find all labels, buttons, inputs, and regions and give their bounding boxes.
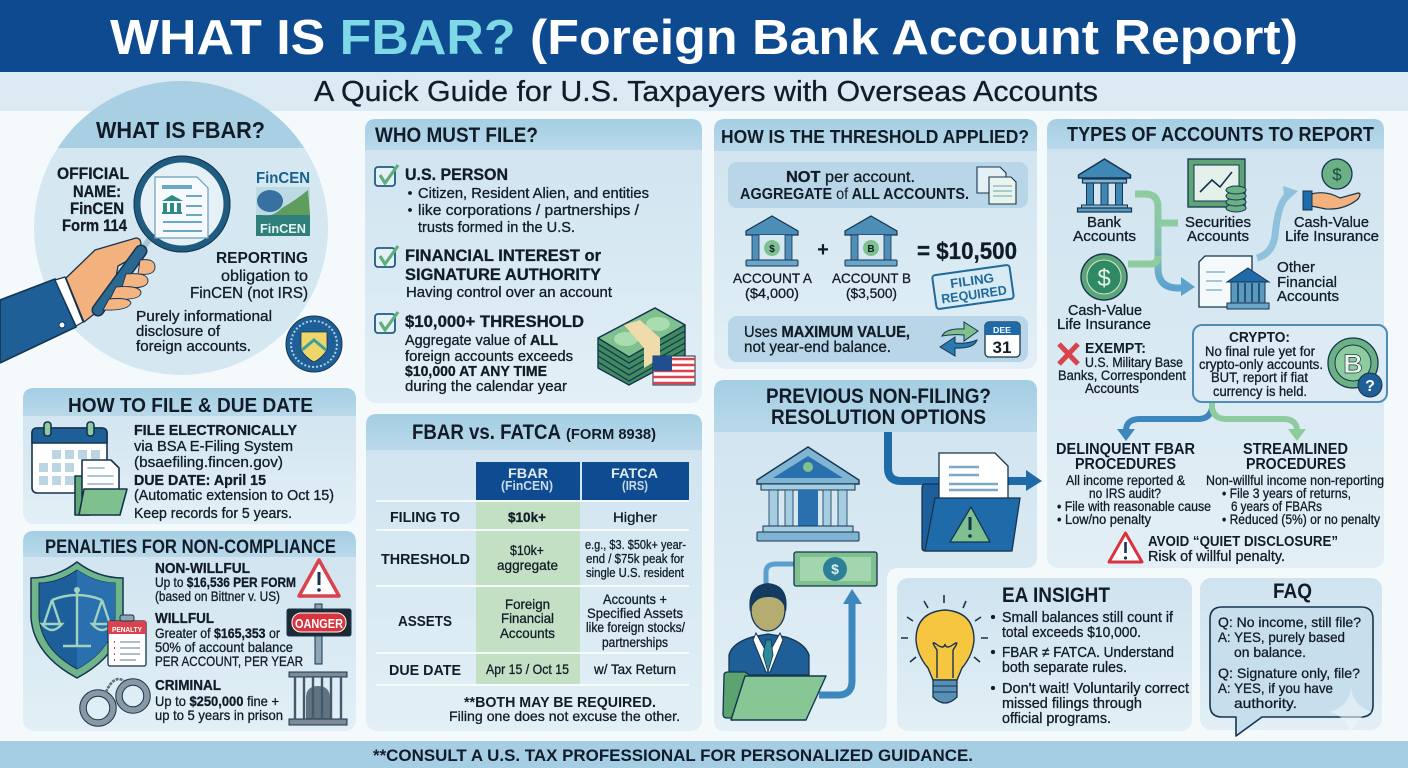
label: account A: ($4,000): [745, 285, 799, 301]
callout: maximum value: Uses MAXIMUM VALUE,: [744, 324, 910, 341]
item: cash-value coin: Cash-Value: [1068, 302, 1142, 319]
text: non-willful: [155, 560, 296, 604]
text: delinquent procedures: • File with reasonable cause: [1057, 499, 1211, 514]
item: cash-value coin: [1057, 254, 1151, 333]
icon: calendar and folder: [32, 422, 127, 515]
text: willful: Greater of $165,353 or: [155, 625, 280, 641]
item: cash-value life insurance, hand: $: [1332, 165, 1342, 184]
icon: warning triangle: [299, 560, 339, 596]
item: threshold: [375, 312, 584, 395]
text: filing details: (Automatic extension to Oct 15): [134, 487, 334, 504]
logo: FinCEN: FinCEN: [260, 221, 306, 236]
bullets: insights: missed filings through: [1002, 696, 1142, 712]
text: willful: [155, 610, 303, 669]
icon: account A bank: $: [769, 244, 775, 255]
heading: EA insight: EA INSIGHT: [1002, 584, 1110, 607]
text: reporting obligation: [190, 250, 308, 302]
speech bubble: questions: Q: No income, still file?: [1218, 614, 1361, 630]
item: threshold: $10,000 AT ANY TIME: [405, 364, 547, 380]
item: cash-value life insurance, hand: Cash-Value: [1294, 214, 1369, 231]
comparison table: Higher: [613, 509, 657, 525]
stamp: filing required: REQUIRED: [940, 282, 1008, 306]
item: bank accounts: [1073, 159, 1136, 245]
arrow: up: [819, 589, 862, 695]
item: cash-value life insurance, hand: [1285, 159, 1379, 245]
text: delinquent procedures: DELINQUENT FBAR: [1056, 441, 1195, 458]
comparison table: (FinCEN): [501, 478, 553, 493]
note: both may be required: Filing one does not excuse the other.: [449, 708, 680, 724]
heading: resolution options: PREVIOUS NON-FILING?: [766, 385, 991, 408]
text: delinquent procedures: • Low/no penalty: [1057, 512, 1151, 527]
text: criminal: up to 5 years in prison: [155, 707, 283, 723]
item: other financial accounts: Financial: [1277, 274, 1337, 291]
item: cash-value life insurance, hand: Life Insurance: [1285, 228, 1379, 245]
note: both may be required: [449, 694, 680, 724]
text: filing details: FILE ELECTRONICALLY: [134, 422, 297, 439]
item: other financial accounts: Accounts: [1277, 288, 1339, 305]
comparison table: FATCA: [611, 465, 658, 481]
note: both may be required: **BOTH MAY BE REQUIRED.: [464, 694, 656, 711]
callout: aggregate: [728, 162, 1028, 208]
comparison table: $10k+: [510, 542, 544, 558]
bullets: insights: Don't wait! Voluntarily correct: [1002, 681, 1189, 697]
comparison table: aggregate: [497, 557, 558, 573]
item: other financial accounts: [1199, 256, 1339, 309]
icon: shield and scales: [31, 562, 123, 678]
icon: penalty clipboard: [108, 615, 146, 666]
speech bubble: questions: authority.: [1234, 695, 1297, 711]
text: non-willful: NON-WILLFUL: [155, 560, 250, 577]
text: reporting obligation: REPORTING: [216, 250, 308, 267]
arrow: to folder: [888, 432, 1042, 491]
text: official name: NAME:: [73, 182, 121, 201]
subtitle band: [0, 72, 1408, 111]
icon: danger sign: OANGER: [295, 616, 344, 631]
subheading: form number: (FORM 8938): [566, 427, 656, 443]
comparison table: Specified Assets: [587, 605, 683, 621]
callout: exempt: U.S. Military Base: [1085, 355, 1183, 370]
item: financial interest: [375, 246, 612, 301]
callout: quiet disclosure warning: Risk of willful penalty.: [1148, 549, 1285, 565]
text: filing details: Keep records for 5 years.: [134, 505, 292, 522]
icon: bitcoin with question: B: [1343, 349, 1363, 379]
callout: aggregate: NOT per account.: [786, 169, 915, 186]
bullets: insights: official programs.: [1002, 711, 1111, 727]
text: willful: 50% of account balance: [155, 639, 293, 655]
icon: account A bank: [746, 216, 798, 266]
icon: handcuffs: [83, 679, 147, 723]
callout: exempt: Accounts: [1085, 381, 1139, 396]
logo: FinCEN: [256, 170, 310, 236]
bullets: insights: Small balances still count if: [1002, 610, 1174, 626]
heading: how to file: HOW TO FILE & DUE DATE: [68, 395, 313, 417]
connectors: green to blue: [1128, 194, 1195, 296]
panel: types of accounts: [1047, 119, 1387, 568]
header band: [0, 0, 1408, 72]
callout: maximum value: [728, 316, 1028, 362]
item: securities: [1185, 159, 1251, 245]
text: willful: WILLFUL: [155, 610, 214, 627]
icon: calendar Dec 31: DEE: [993, 325, 1011, 335]
text: filing details: [134, 422, 334, 522]
comparison table: THRESHOLD: [381, 551, 470, 568]
panel: EA insight: [897, 578, 1192, 731]
icon: cash note: [766, 552, 877, 586]
icon: light bulb: [901, 595, 988, 703]
text: criminal: CRIMINAL: [155, 677, 221, 694]
item: threshold: Aggregate value of ALL: [405, 333, 558, 349]
item: threshold: $10,000+ THRESHOLD: [405, 313, 584, 331]
comparison table: [376, 462, 689, 685]
comparison table: Apr 15 / Oct 15: [486, 661, 569, 677]
bullets: insights: total exceeds $10,000.: [1002, 625, 1141, 641]
item: US person: Citizen, Resident Alien, and entities: [418, 186, 649, 202]
text: delinquent procedures: All income reported &: [1066, 473, 1185, 488]
text: delinquent procedures: PROCEDURES: [1075, 456, 1176, 473]
text: filing details: (bsaefiling.fincen.gov): [134, 454, 283, 471]
label: account B: ACCOUNT B: [832, 270, 911, 286]
icon: calendar Dec 31: 31: [993, 338, 1011, 357]
item: US person: like corporations / partnerships /: [418, 203, 640, 219]
item: securities: Accounts: [1187, 228, 1249, 245]
logo: FinCEN: FinCEN: [256, 170, 310, 187]
comparison table: e.g., $3. $50k+ year-: [585, 537, 686, 552]
item: threshold: during the calendar year: [405, 379, 567, 395]
text: filing details: DUE DATE: April 15: [134, 472, 266, 489]
comparison table: Financial: [501, 610, 554, 626]
title: WHAT IS FBAR? (Foreign Bank Account Report): [110, 11, 1298, 65]
text: streamlined procedures: PROCEDURES: [1246, 456, 1346, 473]
comparison table: Accounts +: [603, 591, 667, 607]
callout: crypto: No final rule yet for: [1205, 344, 1315, 359]
callout: quiet disclosure warning: [1109, 533, 1338, 565]
comparison table: $10k+: [508, 509, 546, 525]
item: other financial accounts: Other: [1277, 259, 1315, 276]
text: delinquent procedures: [1056, 441, 1211, 527]
panel: FBAR vs FATCA: [366, 414, 702, 731]
icon: folder with warning: [922, 453, 1020, 551]
text: official name: FinCEN: [70, 199, 124, 218]
figure: sum: = $10,500: [917, 238, 1017, 265]
callout: maximum value: not year-end balance.: [744, 339, 891, 356]
icon: account B bank: B: [867, 244, 875, 255]
label: account A: [733, 270, 813, 301]
text: official name: Form 114: [62, 216, 127, 235]
item: US person: trusts formed in the U.S.: [418, 220, 575, 236]
text: willful: PER ACCOUNT, PER YEAR: [155, 653, 303, 669]
bullets: insights: FBAR ≠ FATCA. Understand: [1002, 645, 1174, 661]
text: informational disclosure: foreign accounts.: [136, 339, 251, 355]
subtitle band: A Quick Guide for U.S. Taxpayers with Overseas Accounts: [314, 76, 1098, 108]
bullets: insights: both separate rules.: [1002, 660, 1127, 676]
heading: penalties: PENALTIES FOR NON-COMPLIANCE: [45, 537, 336, 558]
text: non-willful: Up to $16,536 PER FORM: [155, 574, 296, 590]
speech bubble: questions: Q: Signature only, file?: [1218, 665, 1360, 681]
item: threshold: foreign accounts exceeds: [405, 349, 573, 365]
panel: FAQ: [1200, 578, 1382, 736]
item: cash-value coin: $: [1097, 265, 1111, 292]
text: criminal: [155, 677, 283, 723]
comparison table: ASSETS: [398, 613, 452, 630]
icon: money stack and flag: [598, 308, 695, 385]
panel: how to file and due date: [23, 388, 356, 524]
callout: crypto: CRYPTO:: [1229, 330, 1290, 346]
heading: FAQ: FAQ: [1273, 580, 1312, 603]
icon: bitcoin with question: ?: [1365, 378, 1375, 395]
comparison table: partnerships: [602, 634, 668, 650]
item: financial interest: SIGNATURE AUTHORITY: [405, 266, 601, 284]
text: criminal: Up to $250,000 fine +: [155, 693, 279, 709]
comparison table: Foreign: [505, 596, 550, 612]
text: streamlined procedures: • File 3 years of returns,: [1222, 486, 1351, 501]
heading: resolution options: RESOLUTION OPTIONS: [771, 406, 986, 429]
speech bubble: questions: A: YES, if you have: [1218, 680, 1333, 696]
panel: how is the threshold applied: [714, 119, 1037, 369]
callout: quiet disclosure warning: AVOID “QUIET DISCLOSURE”: [1148, 534, 1338, 550]
comparison table: Accounts: [500, 625, 555, 641]
panel: who must file: [365, 119, 702, 403]
item: cash-value coin: Life Insurance: [1057, 316, 1151, 333]
icon: penalty clipboard: PENALTY: [112, 625, 142, 634]
comparison table: w/ Tax Return: [593, 661, 676, 677]
stamp: filing required: [932, 265, 1014, 309]
text: reporting obligation: obligation to: [221, 268, 308, 285]
arrow: to life insurance: [1257, 186, 1298, 258]
arrows: to procedures: [1117, 402, 1306, 441]
callout: exempt: EXEMPT:: [1085, 340, 1146, 357]
item: financial interest: FINANCIAL INTEREST or: [405, 247, 602, 265]
icon: jail: [289, 672, 347, 725]
heading: what is FBAR: WHAT IS FBAR?: [96, 117, 265, 143]
stamp: filing required: FILING: [949, 270, 995, 291]
text: informational disclosure: disclosure of: [136, 324, 221, 340]
item: US person: [375, 165, 649, 236]
icon: cash note: $: [831, 561, 839, 577]
item: bank accounts: Accounts: [1073, 228, 1136, 245]
comparison table: single U.S. resident: [586, 565, 684, 580]
heading: types of accounts: TYPES OF ACCOUNTS TO REPORT: [1067, 124, 1374, 146]
label: account B: ($3,500): [846, 285, 897, 301]
panel: penalties: [23, 531, 356, 731]
footer band: **CONSULT A U.S. TAX PROFESSIONAL FOR PERSONALIZED GUIDANCE.: [373, 746, 973, 765]
callout: exempt: Banks, Correspondent: [1058, 368, 1186, 383]
comparison table: FILING TO: [390, 509, 460, 526]
text: streamlined procedures: • Reduced (5%) or no penalty: [1222, 512, 1380, 527]
text: delinquent procedures: no IRS audit?: [1089, 486, 1161, 501]
speech bubble: questions: A: YES, purely based: [1218, 629, 1345, 645]
text: streamlined procedures: 6 years of FBARs: [1231, 499, 1322, 514]
item: bank accounts: Bank: [1087, 214, 1121, 231]
text: streamlined procedures: Non-willful income non-reporting: [1206, 473, 1384, 488]
text: informational disclosure: Purely informational: [136, 309, 272, 325]
panel: previous non-filing: [714, 380, 1042, 731]
label: account B: [832, 270, 911, 301]
comparison table: FBAR: [508, 465, 548, 481]
icon: institution: [757, 447, 859, 541]
text: filing details: via BSA E-Filing System: [134, 438, 293, 455]
heading: who must file: WHO MUST FILE?: [375, 124, 538, 147]
icon: account B bank: [845, 216, 897, 266]
icon: bitcoin with question: [1328, 338, 1382, 397]
label: account A: ACCOUNT A: [733, 270, 813, 286]
text: reporting obligation: FinCEN (not IRS): [190, 285, 308, 302]
callout: crypto: currency is held.: [1213, 384, 1307, 399]
text: streamlined procedures: [1206, 441, 1384, 527]
callout: exempt: [1058, 340, 1186, 396]
speech bubble: questions: [1210, 607, 1373, 736]
comparison table: like foreign stocks/: [586, 619, 685, 635]
heading: FBAR vs FATCA: FBAR vs. FATCA: [412, 421, 561, 444]
symbol: plus: +: [817, 239, 829, 261]
text: informational disclosure: [136, 309, 272, 355]
item: financial interest: Having control over an account: [406, 285, 612, 301]
text: non-willful: (based on Bittner v. US): [155, 588, 280, 604]
icon: person at laptop: [723, 583, 826, 720]
text: official name: [57, 164, 129, 235]
callout: aggregate: AGGREGATE of ALL ACCOUNTS.: [740, 186, 969, 203]
item: US person: U.S. PERSON: [405, 165, 508, 184]
icon: treasury seal: [286, 316, 342, 372]
comparison table: DUE DATE: [389, 662, 461, 679]
item: securities: Securities: [1185, 214, 1251, 231]
icon: danger sign: [287, 604, 351, 664]
heading: resolution options: [766, 385, 991, 429]
panel: what is FBAR circle: [0, 70, 342, 375]
heading: threshold: HOW IS THE THRESHOLD APPLIED?: [721, 126, 1029, 147]
callout: crypto: crypto-only accounts.: [1199, 357, 1323, 372]
text: streamlined procedures: STREAMLINED: [1243, 441, 1348, 458]
speech bubble: questions: on balance.: [1234, 644, 1306, 660]
comparison table: (IRS): [622, 478, 648, 493]
text: official name: OFFICIAL: [57, 164, 129, 183]
callout: crypto: [1193, 325, 1387, 402]
callout: crypto: BUT, report if fiat: [1211, 370, 1308, 385]
icon: hand with magnifying glass: [0, 156, 230, 363]
icon: calendar Dec 31: [985, 322, 1020, 357]
comparison table: end / $75k peak for: [586, 551, 685, 566]
bullets: insights: [991, 610, 1189, 727]
footer band: [0, 741, 1408, 768]
